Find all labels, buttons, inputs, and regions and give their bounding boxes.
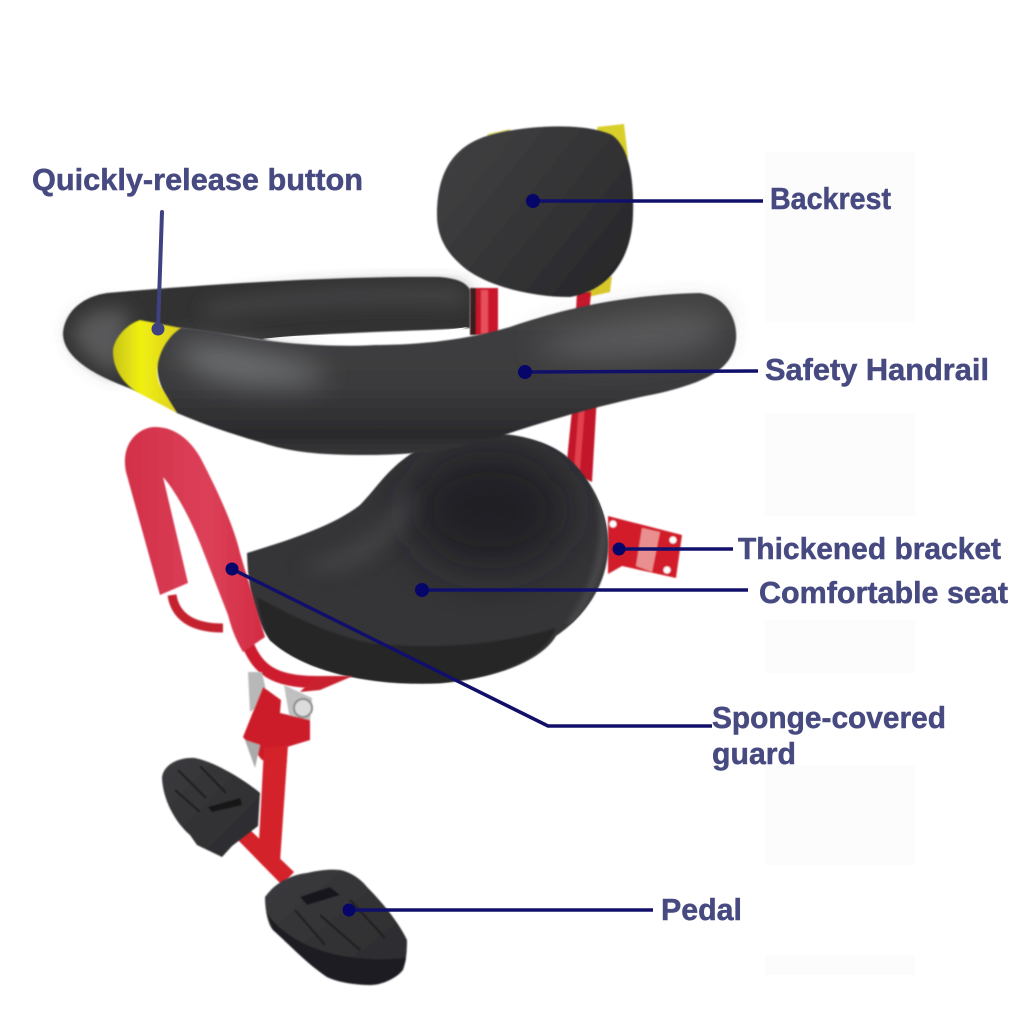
front pedal	[265, 870, 407, 985]
callout: pedal	[342, 892, 742, 927]
callout: quickly-release button	[32, 162, 363, 336]
callout: comfortable seat: Comfortable seat	[759, 575, 1008, 610]
faint background blocks	[765, 152, 915, 975]
callout: sponge-covered guard: Sponge-covered	[712, 700, 946, 735]
opening under rear tube	[262, 327, 468, 342]
callout: comfortable seat	[415, 575, 1008, 610]
rear tube and left tip	[63, 277, 470, 392]
callout: sponge-covered guard	[226, 562, 946, 771]
bracket	[608, 516, 682, 578]
callout: backrest: Backrest	[770, 181, 891, 216]
rear pedal	[162, 758, 260, 857]
callout: safety handrail	[518, 352, 989, 387]
product: child bike seat	[63, 124, 736, 985]
callout: pedal: Pedal	[661, 892, 742, 927]
red posts	[470, 288, 597, 482]
rail highlights	[175, 344, 325, 385]
callout: thickened bracket: Thickened bracket	[738, 531, 1001, 566]
seat underside	[257, 597, 556, 683]
callout: quickly-release button: Quickly-release button	[32, 162, 363, 197]
seat shading	[300, 450, 604, 625]
panel: handrail	[63, 277, 736, 455]
callout: backrest	[526, 181, 891, 216]
sponge-covered guard	[125, 427, 316, 682]
icon: yellow clips behind backrest	[487, 124, 628, 297]
panel: seat	[247, 433, 608, 683]
frame and mount	[236, 672, 353, 885]
backrest	[437, 126, 633, 297]
front tube	[157, 293, 736, 455]
callout: thickened bracket	[612, 531, 1001, 566]
callout: safety handrail: Safety Handrail	[765, 352, 989, 387]
icon: yellow release button	[113, 320, 181, 413]
callout: sponge-covered guard: guard	[712, 736, 796, 771]
